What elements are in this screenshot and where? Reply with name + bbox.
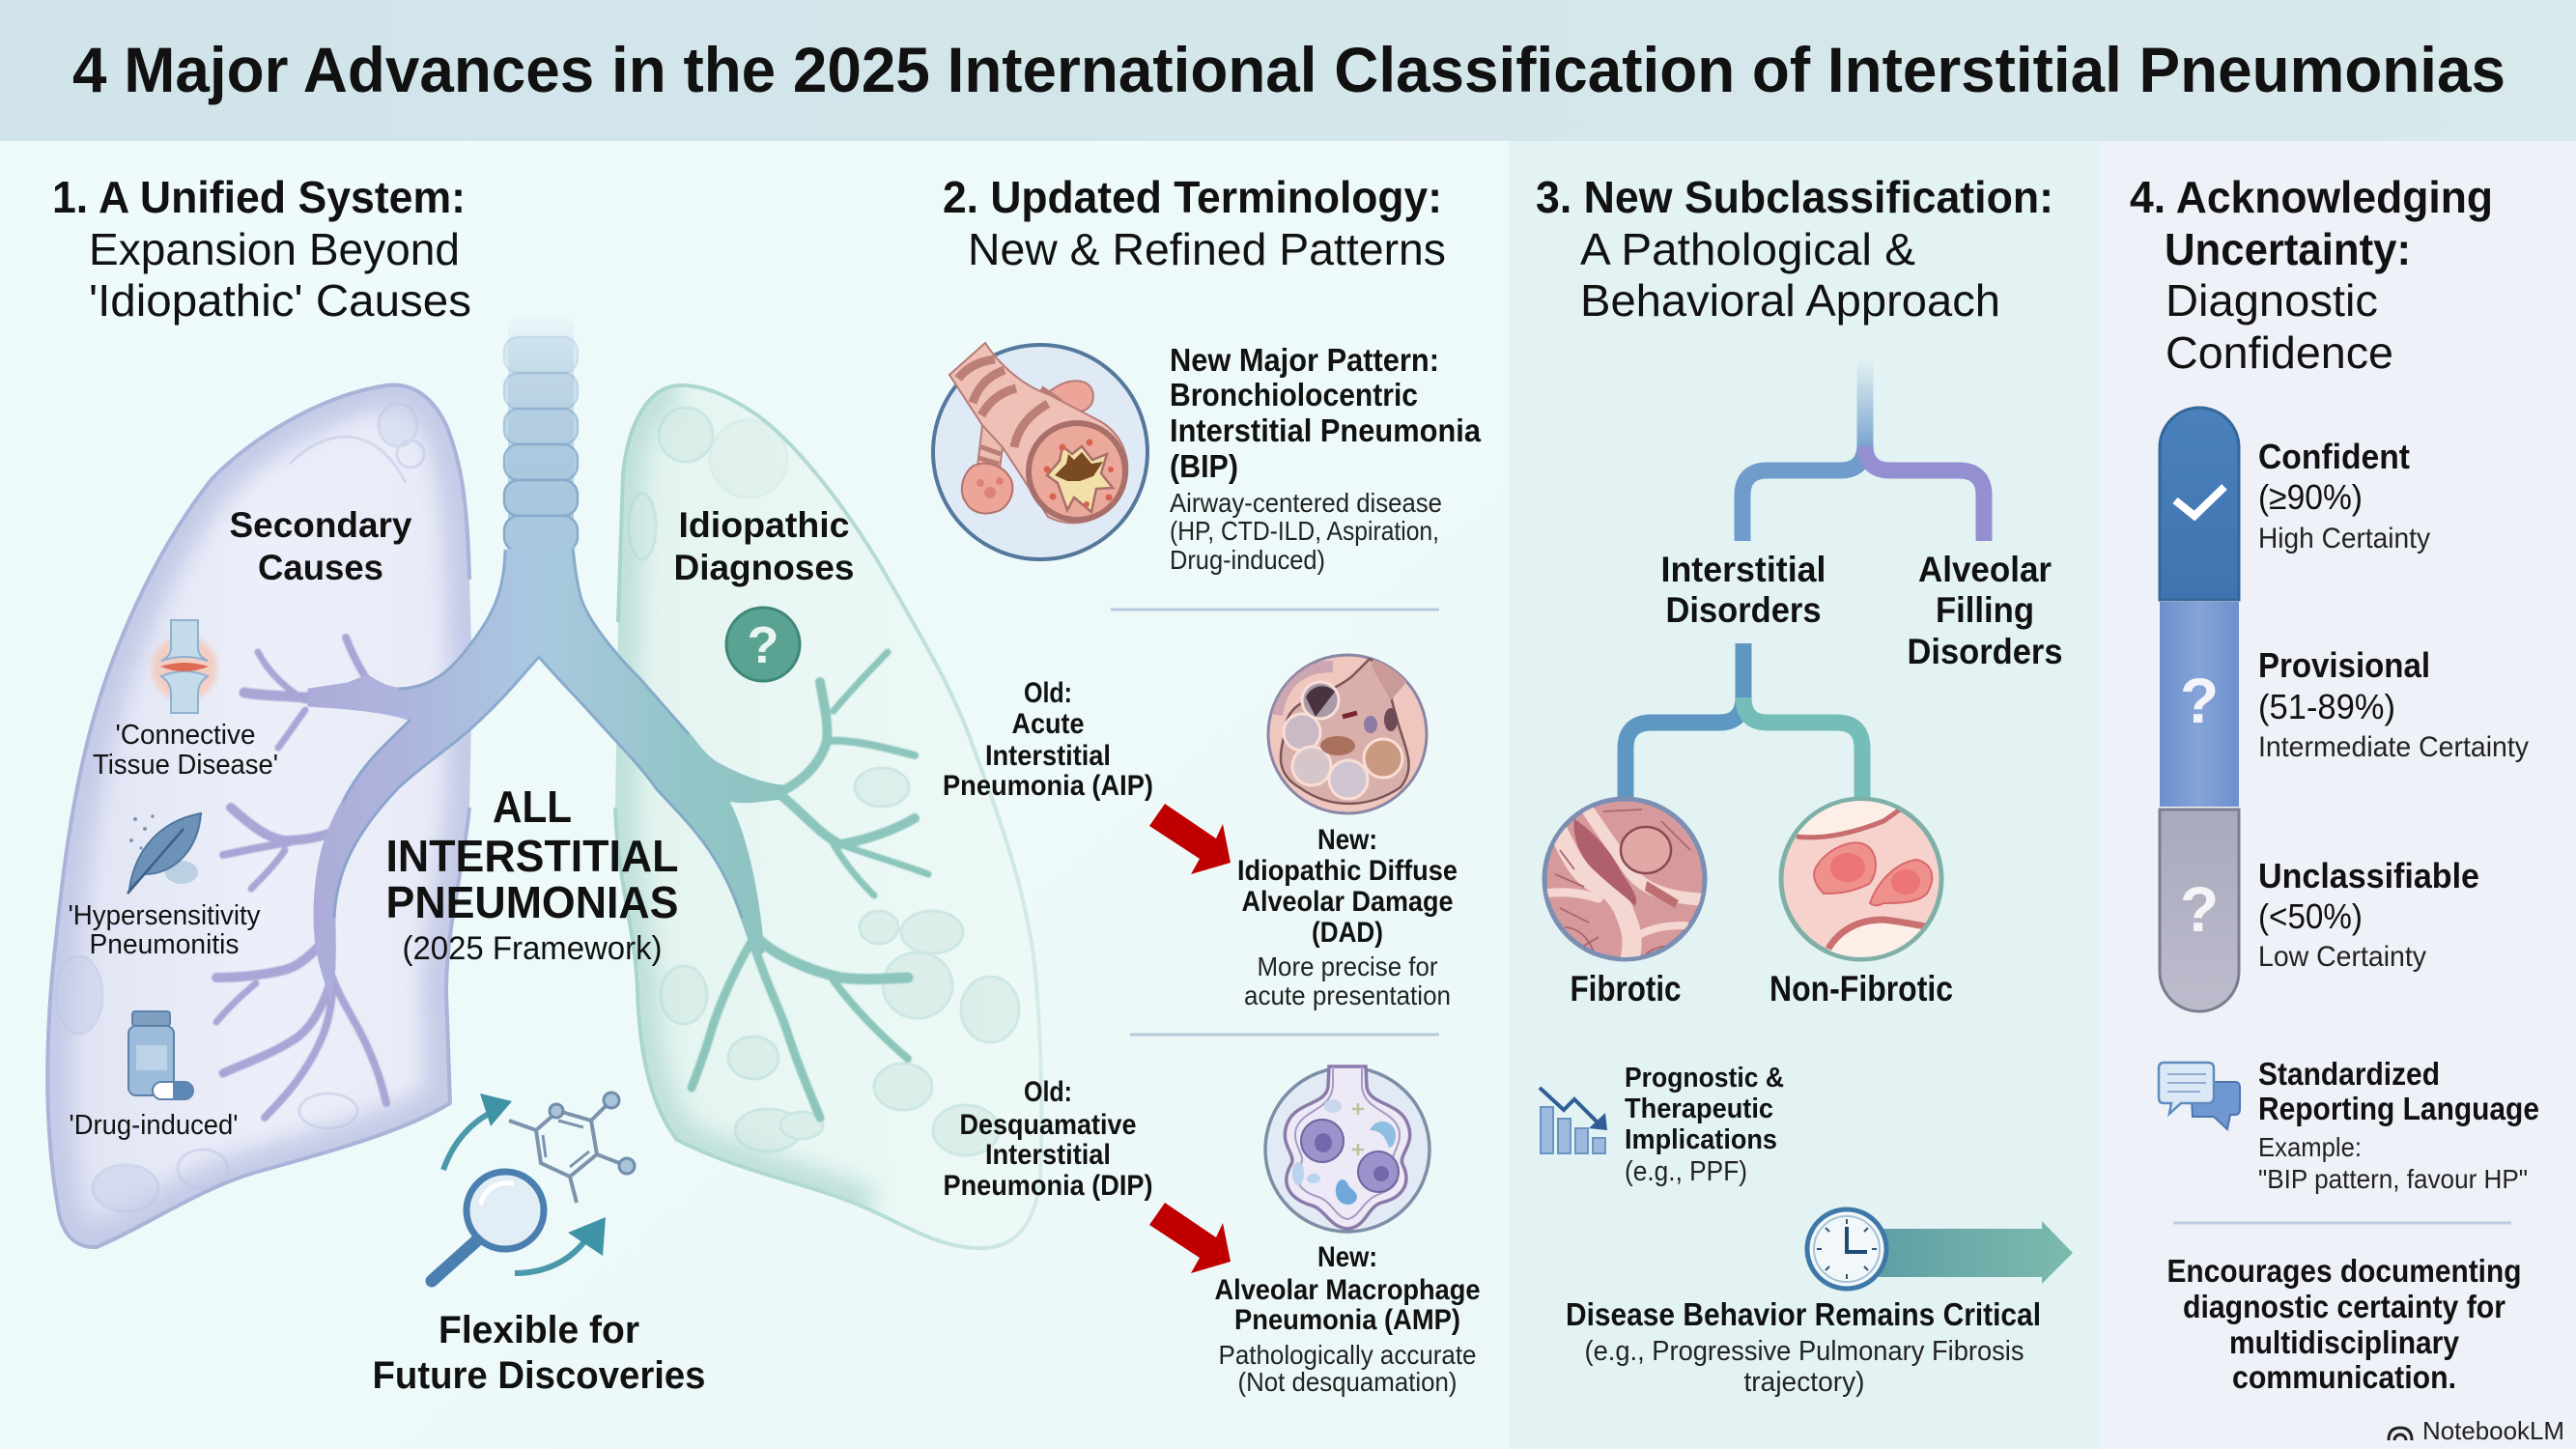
heading: section 4 — [2130, 172, 2493, 378]
heading: section 3: 3. New Subclassification: — [1536, 172, 2053, 222]
text: old DIP: Old: — [1024, 1076, 1072, 1108]
label: interstitial disorders: Disorders — [1665, 590, 1822, 630]
left lung: secondary causes — [47, 384, 472, 1247]
heading: section 4: Uncertainty: — [2165, 224, 2411, 274]
text: hypersensitivity pneumonitis: Pneumonitis — [89, 929, 240, 960]
text: old AIP: Pneumonia (AIP) — [943, 770, 1153, 802]
label: fibrotic: Fibrotic — [1571, 969, 1681, 1009]
text: new major pattern BIP: Drug-induced) — [1170, 545, 1325, 575]
text: new major pattern BIP: Airway-centered disease — [1170, 488, 1442, 518]
center label: all interstitial pneumonias — [386, 781, 678, 967]
icon: declining bar chart — [1540, 1088, 1607, 1153]
text: new AMP: Pneumonia (AMP) — [1234, 1304, 1460, 1336]
heading: section 2 — [943, 172, 1446, 274]
text: new idiopathic DAD: New: — [1317, 824, 1377, 856]
text: old AIP: Interstitial — [985, 740, 1111, 772]
icon: speech bubbles — [2159, 1063, 2240, 1129]
heading: section 4: 4. Acknowledging — [2130, 172, 2493, 222]
center label: all interstitial pneumonias: INTERSTITIAL — [386, 831, 678, 881]
text: connective tissue disease: Tissue Disease' — [93, 750, 278, 781]
text: standardized reporting language: Example: — [2258, 1132, 2362, 1162]
text: encourages documenting: Encourages documenting — [2167, 1253, 2521, 1289]
label: alveolar filling disorders: Alveolar — [1918, 550, 2052, 589]
label: alveolar filling disorders: Disorders — [1907, 632, 2063, 671]
text: drug-induced: 'Drug-induced' — [70, 1110, 238, 1141]
text: encourages documenting — [2167, 1253, 2521, 1395]
illustration: non-fibrotic tissue — [1781, 798, 1941, 966]
icon: drug bottle — [128, 1011, 193, 1099]
label: secondary causes — [230, 505, 412, 587]
text: new major pattern BIP — [1170, 342, 1482, 575]
heading: section 4: Diagnostic — [2166, 275, 2378, 326]
panel: new subclassification — [1536, 172, 2073, 1398]
icon: clock — [1807, 1209, 1886, 1289]
text: prognostic and therapeutic implications: Prognostic & — [1625, 1063, 1784, 1094]
text: provisional: Intermediate Certainty — [2258, 731, 2529, 763]
center label: all interstitial pneumonias: (2025 Framework) — [402, 930, 663, 967]
text: standardized reporting language: "BIP pattern, favour HP" — [2258, 1164, 2528, 1194]
text: disease behavior remains critical: (e.g., Progressive Pulmonary Fibrosis — [1584, 1336, 2024, 1367]
label: interstitial disorders — [1661, 550, 1826, 630]
text: new major pattern BIP: New Major Pattern: — [1170, 342, 1439, 378]
label: idiopathic diagnoses — [674, 505, 854, 587]
right lung: idiopathic diagnoses — [615, 385, 1041, 1248]
text: provisional: Provisional — [2258, 645, 2430, 685]
text: new AMP — [1215, 1241, 1480, 1397]
text: new idiopathic DAD: acute presentation — [1244, 980, 1451, 1010]
text: disease behavior remains critical: trajectory) — [1744, 1367, 1864, 1398]
label: secondary causes: Secondary — [230, 505, 412, 545]
text: hypersensitivity pneumonitis — [68, 900, 261, 960]
heading: section 1 — [52, 172, 471, 326]
text: unclassifiable: (<50%) — [2258, 896, 2363, 936]
label: non-fibrotic: Non-Fibrotic — [1769, 969, 1953, 1009]
heading: section 3 — [1536, 172, 2053, 326]
heading: section 1: 'Idiopathic' Causes — [89, 275, 471, 326]
text: new AMP: New: — [1317, 1241, 1377, 1273]
panel: acknowledging uncertainty — [2130, 172, 2564, 1445]
center label: all interstitial pneumonias: PNEUMONIAS — [386, 877, 678, 927]
text: standardized reporting language: Reporting Language — [2258, 1091, 2539, 1126]
label: idiopathic diagnoses: Idiopathic — [678, 505, 850, 545]
caption: flexible for future discoveries: Flexible for — [439, 1309, 639, 1351]
text: prognostic and therapeutic implications: Therapeutic — [1625, 1094, 1773, 1124]
text: disease behavior remains critical — [1566, 1296, 2041, 1398]
text: old DIP: Desquamative — [960, 1109, 1136, 1141]
text: encourages documenting: multidisciplinary — [2229, 1324, 2460, 1360]
text: prognostic and therapeutic implications — [1625, 1063, 1784, 1187]
text: old DIP: Interstitial — [985, 1139, 1111, 1171]
icon: check — [2175, 487, 2224, 516]
text: confident — [2258, 437, 2430, 554]
text: provisional: (51-89%) — [2258, 687, 2395, 726]
flow tree: interstitial split — [1626, 643, 1862, 802]
heading: section 4: Confidence — [2166, 327, 2393, 378]
heading: section 2: 2. Updated Terminology: — [943, 172, 1442, 222]
arrow: DIP to AMP — [1149, 1203, 1231, 1273]
label: secondary causes: Causes — [258, 548, 383, 587]
text: confident: Confident — [2258, 437, 2410, 476]
text: new idiopathic DAD: Idiopathic Diffuse — [1237, 855, 1458, 887]
text: encourages documenting: communication. — [2232, 1359, 2456, 1395]
illustration: airway cross-section — [933, 343, 1147, 559]
text: prognostic and therapeutic implications: (e.g., PPF) — [1625, 1156, 1747, 1187]
text: encourages documenting: diagnostic certainty for — [2183, 1289, 2505, 1324]
heading: section 1: Expansion Beyond — [89, 224, 460, 274]
text: new major pattern BIP: Interstitial Pneumonia — [1170, 412, 1482, 448]
text: new AMP: (Not desquamation) — [1238, 1367, 1457, 1397]
confidence gauge — [2160, 408, 2239, 1011]
text: new major pattern BIP: (HP, CTD-ILD, Aspiration, — [1170, 516, 1439, 546]
label: alveolar filling disorders: Filling — [1936, 590, 2034, 630]
text: new idiopathic DAD: Alveolar Damage — [1242, 886, 1453, 918]
illustration: fibrotic tissue — [1543, 799, 1710, 966]
text: confident: (≥90%) — [2258, 477, 2363, 517]
text: new idiopathic DAD: More precise for — [1258, 952, 1437, 981]
text: confident: High Certainty — [2258, 523, 2430, 554]
label: alveolar filling disorders — [1907, 550, 2063, 671]
main airway fork — [309, 548, 782, 995]
caption: flexible for future discoveries: Future Discoveries — [373, 1354, 705, 1397]
text: old DIP — [943, 1076, 1153, 1202]
icon: joint — [152, 620, 217, 713]
icon: provisional question: ? — [2180, 665, 2219, 736]
label: idiopathic diagnoses: Diagnoses — [674, 548, 854, 587]
illustration: diffuse alveolar damage — [1268, 638, 1427, 813]
label: interstitial disorders: Interstitial — [1661, 550, 1826, 589]
text: new AMP: Pathologically accurate — [1219, 1340, 1476, 1370]
text: new major pattern BIP: Bronchiolocentric — [1170, 377, 1418, 412]
title: 4 Major Advances in the 2025 International Classification of Interstitial Pneumonias — [72, 34, 2505, 105]
text: new idiopathic DAD: (DAD) — [1312, 917, 1383, 949]
heading: section 3: Behavioral Approach — [1580, 275, 2000, 326]
text: unclassifiable: Unclassifiable — [2258, 856, 2479, 895]
text: standardized reporting language — [2258, 1056, 2539, 1194]
right bronchial tree — [692, 652, 928, 1118]
text: new idiopathic DAD — [1237, 824, 1458, 1010]
text: connective tissue disease: 'Connective — [116, 720, 255, 751]
icon: question mark circle — [726, 608, 800, 681]
text: old AIP: Old: — [1024, 677, 1072, 709]
text: connective tissue disease — [93, 720, 278, 781]
heading: section 3: A Pathological & — [1580, 224, 1915, 274]
text: old DIP: Pneumonia (DIP) — [943, 1170, 1153, 1202]
text: new AMP: Alveolar Macrophage — [1215, 1274, 1480, 1306]
text: unclassifiable: Low Certainty — [2258, 941, 2426, 973]
icon: feather — [127, 813, 201, 894]
icon: question mark circle: ? — [748, 616, 778, 674]
illustration: alveolar macrophages — [1265, 1066, 1430, 1232]
panel: unified system — [47, 172, 1041, 1397]
heading: section 1: 1. A Unified System: — [52, 172, 466, 222]
text: old AIP: Acute — [1012, 708, 1084, 740]
icon: magnifier with molecule and arrows — [432, 1093, 635, 1281]
text: hypersensitivity pneumonitis: 'Hypersensitivity — [68, 900, 261, 931]
text: prognostic and therapeutic implications: Implications — [1625, 1124, 1777, 1155]
watermark: NotebookLM: NotebookLM — [2422, 1416, 2564, 1445]
flow tree: top split — [1742, 359, 1984, 541]
text: old AIP — [943, 677, 1153, 802]
text: unclassifiable — [2258, 856, 2479, 973]
trachea and bronchi — [216, 309, 928, 1118]
center label: all interstitial pneumonias: ALL — [493, 781, 572, 832]
caption: flexible for future discoveries — [373, 1309, 705, 1397]
text: new major pattern BIP: (BIP) — [1170, 448, 1238, 484]
panel: updated terminology — [933, 172, 1482, 1397]
arrow: AIP to DAD — [1149, 804, 1231, 874]
arrow: disease trajectory — [1879, 1221, 2073, 1284]
text: provisional — [2258, 645, 2529, 763]
left bronchial tree — [216, 638, 386, 1118]
icon: unclassifiable question: ? — [2180, 873, 2219, 945]
heading: section 2: New & Refined Patterns — [968, 224, 1446, 274]
text: standardized reporting language: Standardized — [2258, 1056, 2440, 1092]
text: disease behavior remains critical: Disease Behavior Remains Critical — [1566, 1296, 2041, 1332]
